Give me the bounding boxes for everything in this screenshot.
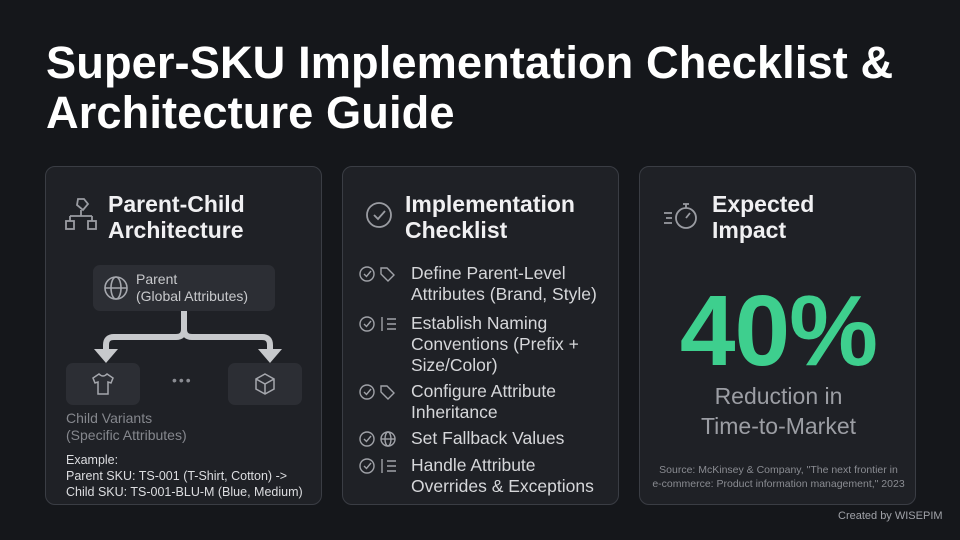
- title: [46, 37, 893, 138]
- checklist items: Conventions (Prefix +: [411, 334, 579, 354]
- checklist items: [359, 263, 597, 496]
- heading: [405, 191, 575, 243]
- heading: Impact: [712, 217, 786, 243]
- heading: Architecture: [108, 217, 243, 243]
- heading: [108, 191, 245, 243]
- child variants label: Child Variants: [66, 410, 152, 426]
- example text: Child SKU: TS-001-BLU-M (Blue, Medium): [66, 485, 303, 499]
- item 2: [359, 313, 579, 375]
- checklist items: Attributes (Brand, Style): [411, 284, 597, 304]
- parent box: (Global Attributes): [136, 288, 248, 304]
- item 5: [359, 455, 594, 496]
- source: [652, 464, 905, 490]
- panel: parent-child architecture: [45, 166, 322, 505]
- checklist items: Handle Attribute: [411, 455, 536, 475]
- heading: Parent-Child: [108, 191, 245, 217]
- item 4: [359, 428, 564, 448]
- item 3: [359, 381, 556, 422]
- parent box: Parent: [136, 271, 177, 287]
- checklist items: Overrides & Exceptions: [411, 476, 594, 496]
- child box: package: [228, 363, 302, 405]
- child variants label: [66, 410, 187, 443]
- checklist items: Inheritance: [411, 402, 498, 422]
- title: Super-SKU Implementation Checklist &: [46, 37, 893, 88]
- checklist items: Set Fallback Values: [411, 428, 564, 448]
- icon: globe: [104, 276, 128, 300]
- example text: [66, 453, 303, 499]
- stat label: [701, 383, 856, 439]
- source: e-commerce: Product information management," 2023: [652, 478, 905, 490]
- panel: expected impact: [639, 166, 916, 505]
- footer credit: Created by WISEPIM: [838, 510, 943, 522]
- child box: shirt: [66, 363, 140, 405]
- title: Architecture Guide: [46, 87, 455, 138]
- dots: •••: [172, 372, 193, 388]
- checklist items: Define Parent-Level: [411, 263, 566, 283]
- icon: check circle: [366, 202, 392, 228]
- checklist items: Size/Color): [411, 355, 498, 375]
- source: Source: McKinsey & Company, "The next frontier in: [659, 464, 898, 476]
- icon: stopwatch: [664, 203, 697, 229]
- example text: Parent SKU: TS-001 (T-Shirt, Cotton) ->: [66, 469, 287, 483]
- heading: Implementation: [405, 191, 575, 217]
- big stat: 40%: [680, 275, 877, 387]
- stat label: Time-to-Market: [701, 413, 856, 439]
- child variants label: (Specific Attributes): [66, 427, 187, 443]
- icon: hierarchy: [65, 198, 97, 230]
- parent box: [93, 265, 275, 311]
- example text: Example:: [66, 453, 118, 467]
- heading: Checklist: [405, 217, 507, 243]
- heading: [712, 191, 814, 243]
- checklist items: Configure Attribute: [411, 381, 556, 401]
- panel: implementation checklist: [342, 166, 619, 505]
- stat label: Reduction in: [715, 383, 842, 409]
- checklist items: Establish Naming: [411, 313, 547, 333]
- arrows: [94, 311, 282, 363]
- item 1: [359, 263, 597, 304]
- heading: Expected: [712, 191, 814, 217]
